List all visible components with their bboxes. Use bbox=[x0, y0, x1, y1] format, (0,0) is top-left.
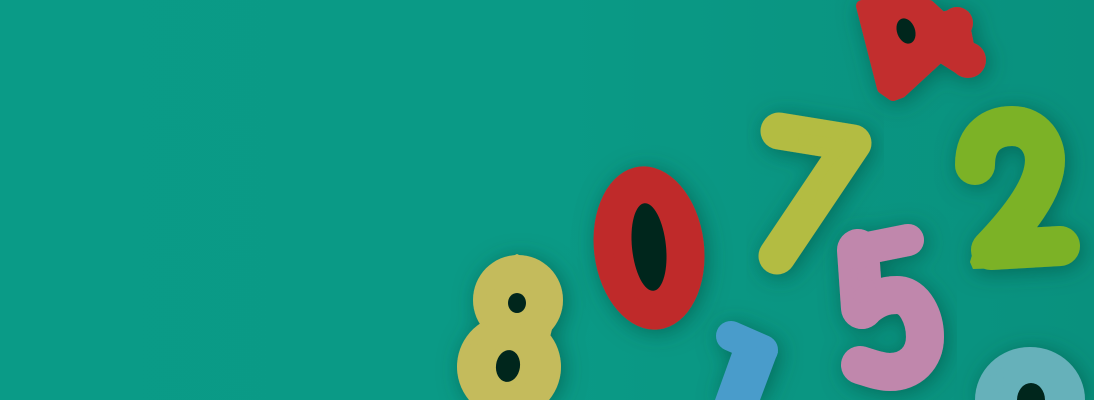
number 2: green: 2 bbox=[1002, 196, 1032, 254]
number 7: lime: 7 bbox=[783, 112, 853, 230]
number 5: pink bbox=[845, 240, 925, 372]
number 4: red, rotated: 4 bbox=[868, 24, 943, 86]
number 0: light blue, cropped: 0 bbox=[989, 357, 1011, 400]
number 0: light blue, cropped bbox=[975, 347, 1085, 400]
number 0: red: 0 bbox=[597, 160, 701, 336]
number 4: red, rotated bbox=[862, 6, 986, 95]
number 5: pink: 5 bbox=[845, 255, 881, 315]
number 2: green bbox=[970, 126, 1060, 269]
